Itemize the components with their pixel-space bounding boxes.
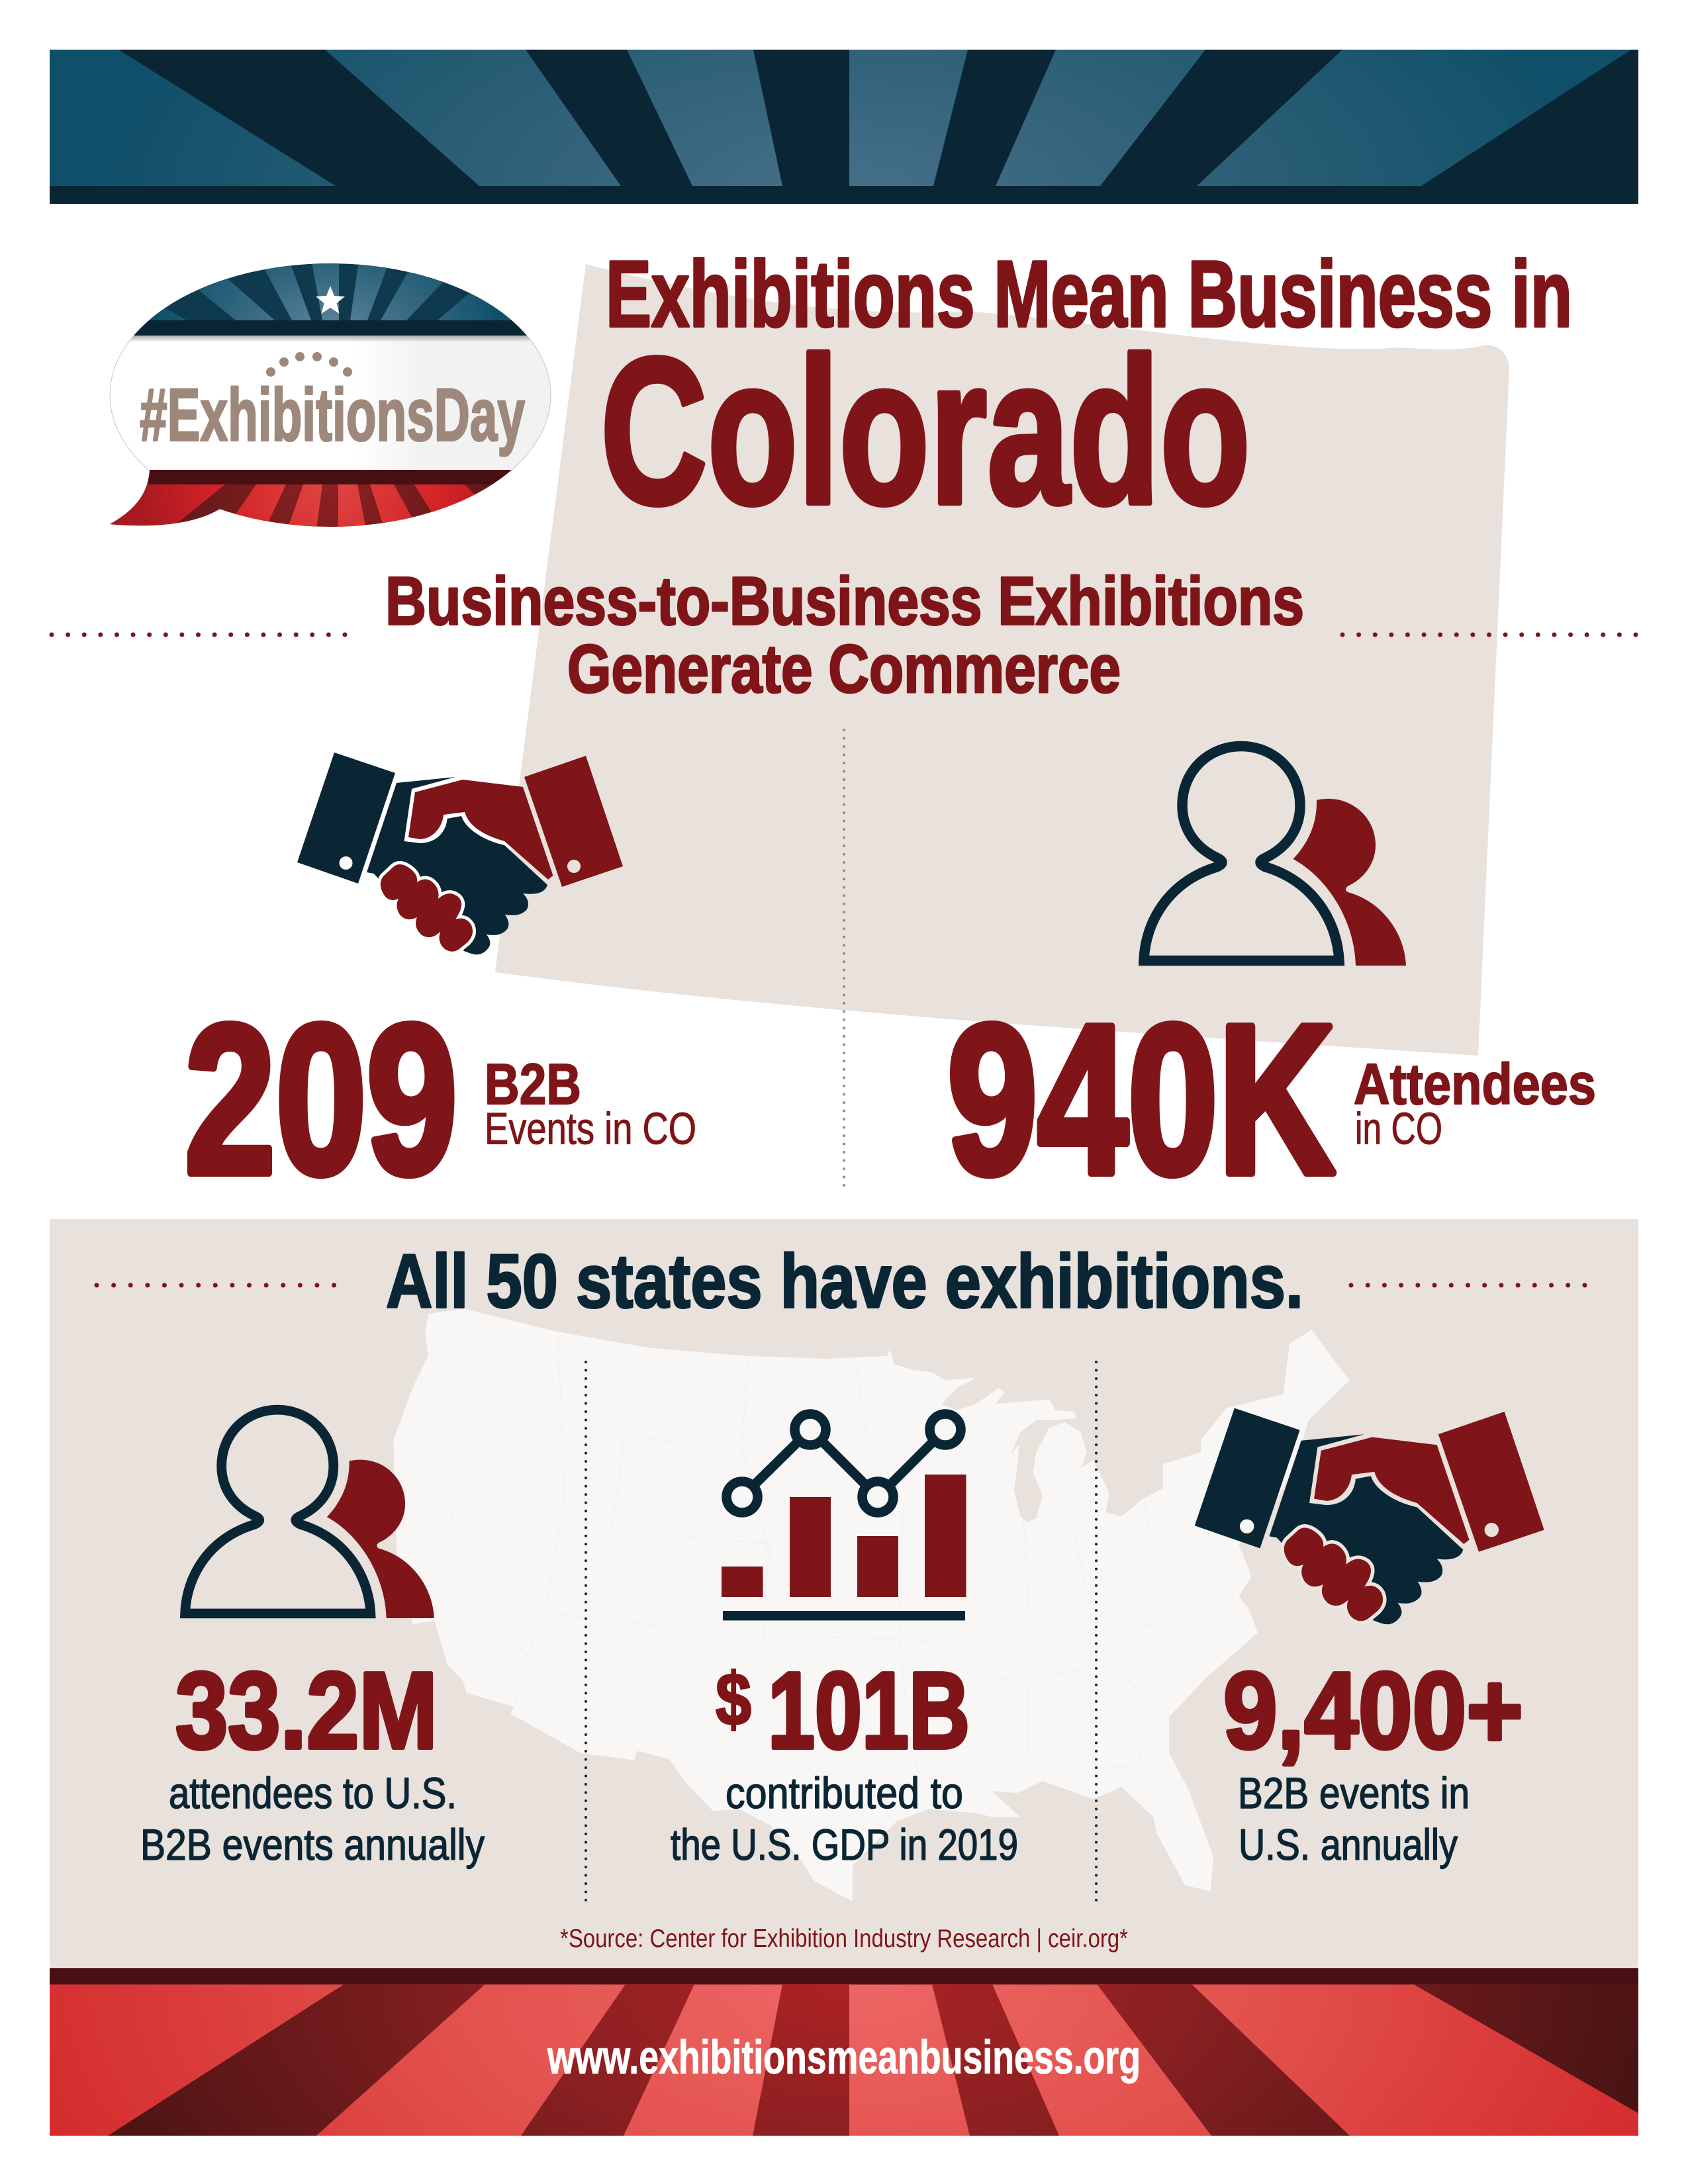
logo: red sunburst bottom [110, 484, 492, 527]
stat: 9,400+ events: U.S. annually [1239, 1820, 1458, 1869]
stat: 9,400+ events: 9,400+ [1223, 1650, 1523, 1771]
stat: $101B GDP: $ [716, 1658, 751, 1741]
chart line [727, 1414, 961, 1513]
logo: arc of dots [266, 352, 352, 377]
stat: 33.2M attendees [140, 1650, 485, 1869]
icon: attendees [1144, 747, 1406, 966]
logo: hashtag text: #ExhibitionsDay [140, 373, 525, 457]
logo: star [316, 286, 345, 314]
stat: 209 B2B events in CO: B2B [485, 1052, 581, 1116]
top banner [50, 50, 1638, 204]
icon: chart [722, 1414, 966, 1620]
subheading: Business-to-Business Exhibitions [385, 563, 1304, 639]
stat: $101B GDP: the U.S. GDP in 2019 [671, 1820, 1018, 1869]
panel heading: All 50 states have exhibitions. [386, 1239, 1303, 1324]
stat: 940K attendees in CO: 940K [947, 981, 1335, 1218]
logo: navy band [134, 320, 527, 336]
source note: *Source: Center for Exhibition Industry Research | ceir.org* [560, 1925, 1128, 1953]
title: Colorado: Colorado [600, 314, 1250, 547]
logo: dark red band [147, 470, 512, 484]
icon: attendees (national) [185, 1410, 434, 1618]
stat: 209 B2B events in CO: 209 [185, 981, 457, 1218]
stat: 33.2M attendees: B2B events annually [140, 1820, 485, 1869]
chart baseline [723, 1611, 965, 1620]
stat: 209 B2B events in CO [185, 981, 696, 1218]
map of the United States [393, 1308, 1350, 1901]
stat: $101B GDP: 101B [768, 1650, 970, 1771]
stat: 33.2M attendees: attendees to U.S. [169, 1768, 457, 1817]
stat: 209 B2B events in CO: Events in CO [485, 1104, 696, 1154]
Colorado state background shape [495, 264, 1509, 1056]
chart bars [722, 1475, 966, 1597]
subheading: Generate Commerce [567, 631, 1121, 707]
subheading [385, 563, 1304, 707]
icon: handshake (national) [1195, 1408, 1544, 1624]
footer banner [50, 1968, 1638, 2136]
stat: $101B GDP [671, 1650, 1018, 1869]
logo: white band [397, 340, 551, 470]
icon: handshake [297, 752, 623, 954]
logo: hairline outline [110, 336, 551, 470]
logo: blue sunburst top [149, 263, 512, 320]
stat: $101B GDP: contributed to [726, 1768, 963, 1817]
speech bubble logo: #ExhibitionsDay [110, 263, 551, 527]
stat: 940K attendees in CO: in CO [1355, 1104, 1442, 1154]
stat: 9,400+ events: B2B events in [1238, 1768, 1470, 1817]
stat: 940K attendees in CO: Attendees [1354, 1052, 1596, 1116]
stat: 33.2M attendees: 33.2M [175, 1650, 438, 1771]
stat: 9,400+ events [1223, 1650, 1523, 1869]
panel: national statistics [50, 1219, 1638, 1968]
footer URL: www.exhibitionsmeanbusiness.org [547, 2032, 1141, 2084]
